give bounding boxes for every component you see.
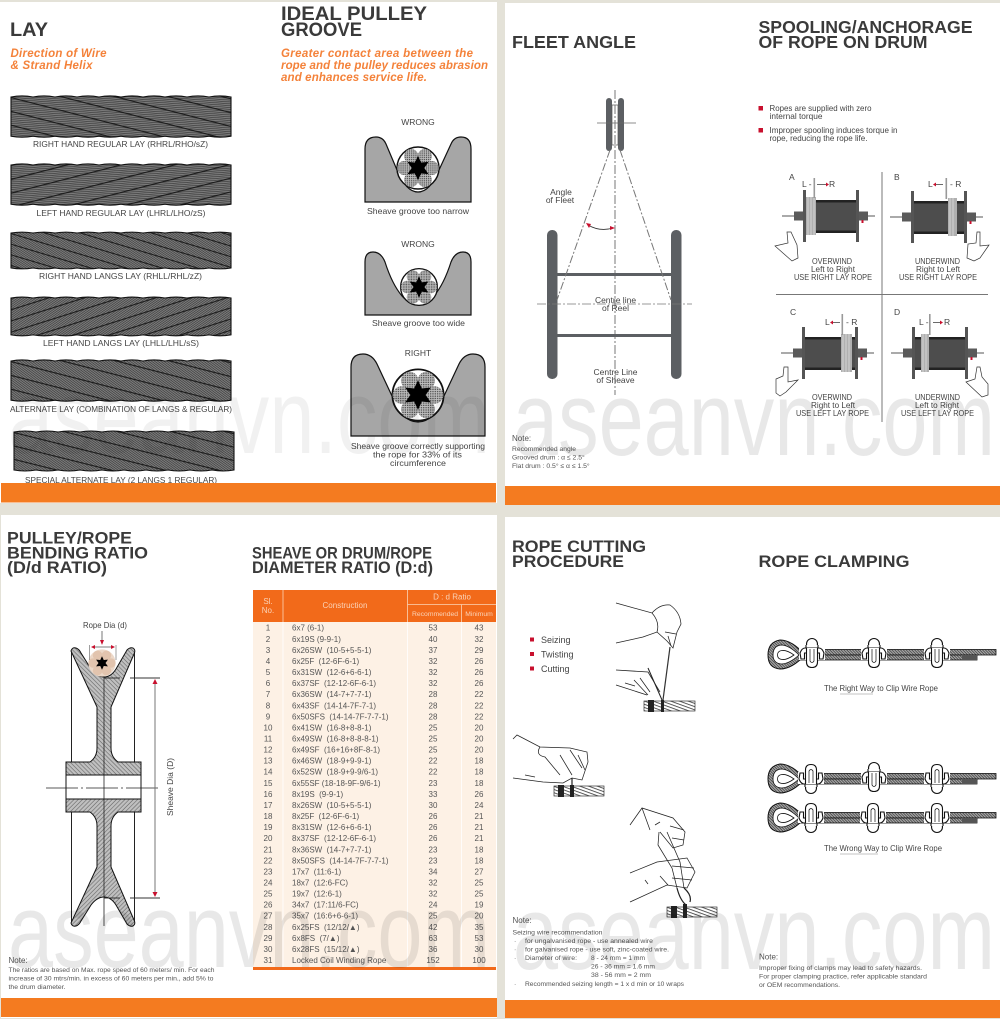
panel: lay and ideal pulley groove [0,2,497,503]
table: D:d ratio: 22 [475,712,484,721]
table: D:d ratio: 20 [475,746,484,755]
diagram: right way clamping [768,638,996,669]
bullets: spooling notes: Improper spooling induces torque in [770,125,898,135]
table: D:d ratio: 6x8FS (7/▲) [292,934,340,943]
caption: spool A: OVERWIND [812,256,852,266]
table: D:d ratio: 18 [475,768,484,777]
table: D:d ratio: 17x7 (11:6-1) [292,867,342,876]
rope: left hand langs lay [11,297,231,336]
table: D:d ratio: 28 [429,712,438,721]
heading: rope cutting procedure [512,537,646,571]
heading: ideal pulley groove: IDEAL PULLEY [281,4,427,25]
table: D:d ratio: 21 [475,834,484,843]
diagram: wrong way clamping one [768,762,996,794]
table: D:d ratio: 100 [472,956,486,965]
table: D:d ratio: 25 [475,890,484,899]
caption: wrong way: The Wrong Way to Clip Wire Rope [824,843,942,853]
table: D:d ratio: 22 [429,768,438,777]
table: D:d ratio: 18x7 (12:6-FC) [292,878,348,888]
subheading: groove benefit: rope and the pulley reduces abrasion [281,60,488,72]
table: D:d ratio: 26 [475,657,484,666]
table: D:d ratio: No. [262,606,274,615]
table: D:d ratio: 37 [429,646,438,655]
note: recommended angle: Note: [512,434,531,443]
note: clamp fixing: For proper clamping practice, refer applicable standard [759,974,927,980]
note: seizing wire recommendation: · [514,938,516,945]
table: D:d ratio: 19x7 (12:6-1) [292,890,342,899]
table: D:d ratio: 6x28FS (15/12/▲) [292,945,360,954]
caption: spool A: USE RIGHT LAY ROPE [794,272,872,282]
diagram: spool C: L [825,317,830,327]
table: D:d ratio: 42 [429,923,438,932]
orange footer bar [1,998,497,1017]
table: D:d ratio: 18 [475,856,484,865]
label: centre line of reel: of Reel [602,303,629,313]
caption: spool B [899,256,977,282]
table: D:d ratio: 6x49SW (16-8+8-8-8-1) [292,734,379,744]
caption: correct groove: the rope for 33% of its [373,450,462,460]
table: D:d ratio: 5 [266,668,271,677]
table: D:d ratio: 20 [264,834,273,843]
note: seizing wire recommendation: · [514,981,516,988]
table: D:d ratio: 21 [264,845,273,854]
table: D:d ratio: 17 [264,801,273,810]
table: D:d ratio: 32 [429,878,438,888]
table: D:d ratio: 25 [429,912,438,921]
label: centre line of reel: Centre line [595,295,636,305]
table: D:d ratio: 6x25F (12-6F-6-1) [292,657,359,666]
caption: correct groove: Sheave groove correctly supporting [351,441,485,451]
note: seizing wire recommendation: for galvanised rope - use soft, zinc-coated wire. [525,946,669,954]
table: D:d ratio: 15 [264,779,273,788]
note: seizing wire recommendation: 8 - 24 mm = 1 mm [591,955,645,962]
diagram: spool B: - R [950,179,961,189]
table: D:d ratio: 28 [429,690,438,699]
bullets: cutting steps: Twisting [541,650,574,660]
table: D:d ratio: 30 [429,801,438,810]
diagram: spool D: D [894,307,900,317]
table: D:d ratio: 40 [429,635,438,644]
table: D:d ratio: 34 [429,867,438,876]
table: D:d ratio: 35 [475,923,484,932]
table: D:d ratio: 33 [429,790,438,799]
note: seizing wire recommendation: · [514,946,516,954]
table: D:d ratio: 22 [475,690,484,699]
label: angle of fleet: Angle [550,187,572,197]
table: D:d ratio: 14 [264,768,273,777]
diagram: sheave groove correct [351,354,485,436]
table: D:d ratio: D : d Ratio [433,592,471,602]
label: wrong narrow: WRONG [401,117,435,127]
caption: right hand regular lay: RIGHT HAND REGULAR LAY (RHRL/RHO/sZ) [33,139,208,149]
heading: sheave or drum/rope diameter ratio: SHEAVE OR DRUM/ROPE [252,544,432,562]
caption: spool D: UNDERWIND [915,392,960,402]
note: seizing wire recommendation: 26 - 36 mm = 1.6 mm [591,964,655,970]
table: D:d ratio: 18 [475,757,484,766]
heading: pulley/rope bending ratio: (D/d RATIO) [7,559,107,577]
panel: rope cutting and clamping [505,517,1000,1018]
table: D:d ratio: 2 [266,635,271,644]
note: seizing wire recommendation: Recommended seizing length = 1 x d min or 10 wraps [525,981,685,988]
note: seizing wire recommendation: for ungalvanised rope - use annealed wire [525,938,653,945]
caption: right way: The Right Way to Clip Wire Rope [824,683,938,693]
table: D:d ratio: 6x41SW (16-8+8-8-1) [292,723,372,732]
table: D:d ratio: 6x49SF (16+16+8F-8-1) [292,746,380,755]
table: D:d ratio: 35x7 (16:6+6-6-1) [292,912,358,921]
table: D:d ratio: 8x26SW (10-5+5-5-1) [292,801,372,810]
label: angle of fleet [546,187,575,205]
table: D:d ratio: 20 [475,734,484,744]
table: D:d ratio: 10 [264,723,273,732]
heading: rope cutting procedure: ROPE CUTTING [512,537,646,556]
table: D:d ratio: Minimum [465,611,493,618]
heading: rope clamping: ROPE CLAMPING [758,552,910,571]
table: D:d ratio: 25 [429,746,438,755]
subheading: direction of wire: & Strand Helix [10,60,93,72]
diagram: sheave groove too wide [365,252,471,315]
orange footer bar [1,483,496,502]
table: D:d ratio: 24 [475,801,484,810]
diagram: spool A: L - [802,179,812,189]
heading: ideal pulley groove: GROOVE [281,20,362,41]
note: recommended angle [512,434,590,470]
note: ratio basis: Note: [8,956,28,965]
table: D:d ratio: 63 [429,934,438,943]
note: clamp fixing: Note: [759,952,778,962]
table: D:d ratio: 26 [475,679,484,688]
diagram: spool B [890,172,989,261]
subheading: direction of wire: Direction of Wire [10,48,107,60]
table: D:d ratio: 53 [475,934,484,943]
table: D:d ratio: 9 [266,712,271,721]
diagram: wrong way clamping two [768,803,996,832]
heading: lay: LAY [10,20,48,41]
table: D:d ratio: 22 [264,856,273,865]
heading: spooling [758,17,972,52]
caption: left hand regular lay: LEFT HAND REGULAR LAY (LHRL/LHO/zS) [36,208,206,218]
heading: sheave or drum/rope diameter ratio: DIAMETER RATIO (D:d) [252,559,433,577]
table: D:d ratio: 26 [264,901,273,910]
table: D:d ratio: 6x19S (9-9-1) [292,635,341,644]
table: D:d ratio: 16 [264,790,273,799]
subheading: direction of wire [10,48,107,72]
label: centre line of reel [595,295,636,313]
diagram: spool A [775,172,875,261]
table: D:d ratio: 18 [264,812,273,821]
table: D:d ratio: 53 [429,624,438,633]
table: D:d ratio: 26 [475,668,484,677]
table: D:d ratio: 6 [266,679,271,688]
table: D:d ratio: Locked Coil Winding Rope [292,956,387,965]
table: D:d ratio: 28 [429,701,438,710]
note: recommended angle: Flat drum : 0.5° ≤ α ≤ 1.5° [512,462,590,470]
table: D:d ratio: 27 [264,912,273,921]
table: D:d ratio: 7 [266,690,271,699]
caption: spool C: USE LEFT LAY ROPE [796,408,869,418]
table: D:d ratio: 23 [429,779,438,788]
heading: spooling: OF ROPE ON DRUM [758,32,928,52]
table: D:d ratio: 13 [264,757,273,766]
caption: correct groove: circumference [390,458,446,468]
caption: spool B: UNDERWIND [915,256,960,266]
note: seizing wire recommendation: 38 - 56 mm = 2 mm [591,972,651,979]
diagram: spool B: L [928,179,933,189]
table: D:d ratio: Recommended [412,611,458,618]
table: D:d ratio: 32 [475,635,484,644]
bullets: spooling notes [758,103,898,143]
table: D:d ratio: 6x46SW (18-9+9-9-1) [292,757,372,766]
table: D:d ratio: 26 [475,790,484,799]
caption: spool B: Right to Left [916,264,961,274]
table: D:d ratio: 31 [264,956,273,965]
diagram: spool D: R [944,317,950,327]
note: seizing wire recommendation: · [514,955,516,962]
table: D:d ratio: 20 [475,723,484,732]
caption: spool D: Left to Right [915,400,960,410]
table: D:d ratio: 8x19S (9-9-1) [292,790,343,799]
heading: pulley/rope bending ratio: BENDING RATIO [7,544,148,562]
caption: right hand langs lay: RIGHT HAND LANGS LAY (RHLL/RHL/zZ) [39,271,202,281]
table: D:d ratio: 6x37SF (12-12-6F-6-1) [292,679,376,688]
note: recommended angle: Grooved drum : α ≤ 2.5° [512,454,585,462]
table: D:d ratio: 6x50SFS (14-14-7F-7-7-1) [292,712,389,721]
table: D:d ratio: 32 [429,657,438,666]
heading: sheave or drum/rope diameter ratio [252,544,433,577]
table: D:d ratio: 24 [264,878,273,888]
note: seizing wire recommendation: Note: [512,916,532,925]
table: D:d ratio: 21 [475,812,484,821]
table: D:d ratio: 19 [475,901,484,910]
diagram: spool D: L - [919,317,929,327]
table: D:d ratio: 6x55SF (18-18-9F-9/6-1) [292,779,381,788]
illustration: twisting [513,735,604,797]
diagram: spool C: C [790,307,796,317]
table: D:d ratio: 25 [475,878,484,888]
table: D:d ratio: 18 [475,779,484,788]
table: D:d ratio: 26 [429,834,438,843]
table: D:d ratio: 21 [475,823,484,832]
note: clamp fixing: Improper fixing of clamps may lead to safety hazards. [759,965,922,972]
note: recommended angle: Recommended angle [512,446,576,453]
heading: ideal pulley groove [281,4,427,41]
table: D:d ratio: 6x43SF (14-14-7F-7-1) [292,701,376,710]
subheading: groove benefit: Greater contact area between the [281,48,474,60]
note: ratio basis: increase of 30 mtrs/min. in excess of 60 meters per min., add 5% to [8,976,214,982]
diagram: spool C [776,307,874,396]
bullets: spooling notes: rope, reducing the rope life. [770,133,868,143]
orange footer bar [505,1000,1000,1018]
label: sheave dia: Sheave Dia (D) [165,758,175,816]
caption: spool A: Left to Right [811,264,856,274]
caption: too wide: Sheave groove too wide [372,318,465,328]
rope: left hand regular lay [11,164,231,205]
diagram: spool A: A [789,172,795,182]
table: D:d ratio: 12 [264,746,273,755]
table: D:d ratio: 8x50SFS (14-14-7F-7-7-1) [292,856,389,865]
table: D:d ratio [253,590,496,970]
table: D:d ratio: 30 [264,945,273,954]
table: D:d ratio: 8 [266,701,271,710]
diagram: spool B: B [894,172,900,182]
orange footer bar [505,486,1000,505]
bullets: spooling notes: internal torque [770,111,823,121]
caption: correct groove [351,441,485,468]
table: D:d ratio: 8x31SW (12-6+6-6-1) [292,823,372,832]
panel: bending ratio and diameter ratio [1,515,497,1018]
table: D:d ratio: 6x52SW (18-9+9-9/6-1) [292,768,378,777]
table: D:d ratio: 20 [475,912,484,921]
diagram: spool C: - R [846,317,857,327]
bullets: cutting steps: Cutting [541,664,570,674]
table: D:d ratio: 19 [264,823,273,832]
table: D:d ratio: 3 [266,646,271,655]
table: D:d ratio: 25 [264,890,273,899]
table: D:d ratio: 25 [429,734,438,744]
label: centre line of sheave: Centre Line [594,367,638,377]
table: D:d ratio: 23 [264,867,273,876]
table: D:d ratio: 6x36SW (14-7+7-7-1) [292,690,372,699]
illustration: seizing [616,603,695,712]
note: ratio basis [8,956,215,991]
caption: spool D [901,392,974,418]
table: D:d ratio: 11 [264,734,273,744]
bullets: cutting steps: Seizing [541,635,571,645]
diagram: sheave groove too narrow [365,137,471,202]
label: right: RIGHT [405,348,431,358]
rope: special alternate lay [14,431,234,471]
note: seizing wire recommendation: Diameter of wire: [525,955,577,962]
table: D:d ratio: 6x7 (6-1) [292,624,324,633]
table: D:d ratio: 24 [429,901,438,910]
table: D:d ratio: 26 [429,812,438,821]
rope: right hand regular lay [11,96,231,137]
table: D:d ratio: 18 [475,845,484,854]
table: D:d ratio: 34x7 (17:11/6-FC) [292,901,359,910]
caption: alternate lay: ALTERNATE LAY (COMBINATION OF LANGS & REGULAR) [10,404,232,414]
table: D:d ratio: 22 [475,701,484,710]
table: D:d ratio: 23 [429,845,438,854]
heading: fleet angle: FLEET ANGLE [512,32,636,52]
rope: alternate lay [11,360,231,401]
note: clamp fixing: or OEM recommendations. [759,982,840,989]
note: seizing wire recommendation [512,916,685,988]
table: D:d ratio: 30 [475,945,484,954]
heading: spooling: SPOOLING/ANCHORAGE [758,17,972,37]
diagram: fleet angle [537,90,692,395]
diagram: spool D [891,307,988,397]
caption: spool D: USE LEFT LAY ROPE [901,408,974,418]
heading: pulley/rope bending ratio [7,530,148,577]
table: D:d ratio: Construction [323,601,367,610]
caption: spool A [794,256,872,282]
label: wrong wide: WRONG [401,239,435,249]
subheading: groove benefit [281,48,488,84]
watermark: bottom left: aseanvn.com [8,873,490,990]
caption: spool C: Right to Left [811,400,856,410]
table: D:d ratio: 6x31SW (12-6+6-6-1) [292,668,372,677]
table: D:d ratio: 29 [475,646,484,655]
caption: too narrow: Sheave groove too narrow [367,206,470,216]
table: D:d ratio: 32 [429,890,438,899]
watermark: top left: aseanvn.com [8,359,490,476]
table: D:d ratio: 32 [429,668,438,677]
label: centre line of sheave [594,367,638,385]
table: D:d ratio: 6x26SW (10-5+5-5-1) [292,646,372,655]
note: ratio basis: the drum diameter. [8,984,66,991]
caption: special alternate lay: SPECIAL ALTERNATE LAY (2 LANGS 1 REGULAR) [25,475,217,485]
rope: right hand langs lay [11,232,231,269]
table: D:d ratio: 1 [266,624,271,633]
table: D:d ratio: 32 [429,679,438,688]
note: clamp fixing [759,952,927,989]
table: D:d ratio: 23 [429,856,438,865]
caption: spool C [796,392,869,418]
table: D:d ratio: 8x25F (12-6F-6-1) [292,812,359,821]
bullets: spooling notes: Ropes are supplied with zero [770,103,872,113]
bullets: cutting steps [530,635,574,674]
table: D:d ratio: 28 [264,923,273,932]
table: D:d ratio: 43 [475,624,484,633]
label: centre line of sheave: of Sheave [596,375,635,385]
subheading: groove benefit: and enhances service life. [281,72,427,84]
heading: rope cutting procedure: PROCEDURE [512,552,624,571]
table: D:d ratio: 29 [264,934,273,943]
illustration: cutting [630,808,717,918]
table: D:d ratio: 22 [429,757,438,766]
table: D:d ratio: 36 [429,945,438,954]
table: D:d ratio: 27 [475,867,484,876]
note: seizing wire recommendation: Seizing wire recommendation [512,930,603,936]
label: angle of fleet: of Fleet [546,195,575,205]
table: D:d ratio: 25 [429,723,438,732]
table: D:d ratio: 26 [429,823,438,832]
table: D:d ratio: Sl. [263,597,273,606]
panel: fleet angle and spooling [505,3,1000,505]
table: D:d ratio: 4 [266,657,271,666]
label: rope dia: Rope Dia (d) [83,620,127,630]
table: D:d ratio: 8x36SW (14-7+7-7-1) [292,845,372,854]
caption: spool C: OVERWIND [812,392,852,402]
caption: spool B: USE RIGHT LAY ROPE [899,272,977,282]
table: D:d ratio: 8x37SF (12-12-6F-6-1) [292,834,376,843]
note: ratio basis: The ratios are based on Max. rope speed of 60 meters/ min. For each [8,967,215,974]
table: D:d ratio: 152 [426,956,440,965]
table: D:d ratio: 6x25FS (12/12/▲) [292,923,360,932]
heading: pulley/rope bending ratio: PULLEY/ROPE [7,530,132,548]
diagram: sheave cross-section [46,631,160,926]
caption: left hand langs lay: LEFT HAND LANGS LAY (LHLL/LHL/sS) [43,338,199,348]
diagram: spool A: R [829,179,835,189]
